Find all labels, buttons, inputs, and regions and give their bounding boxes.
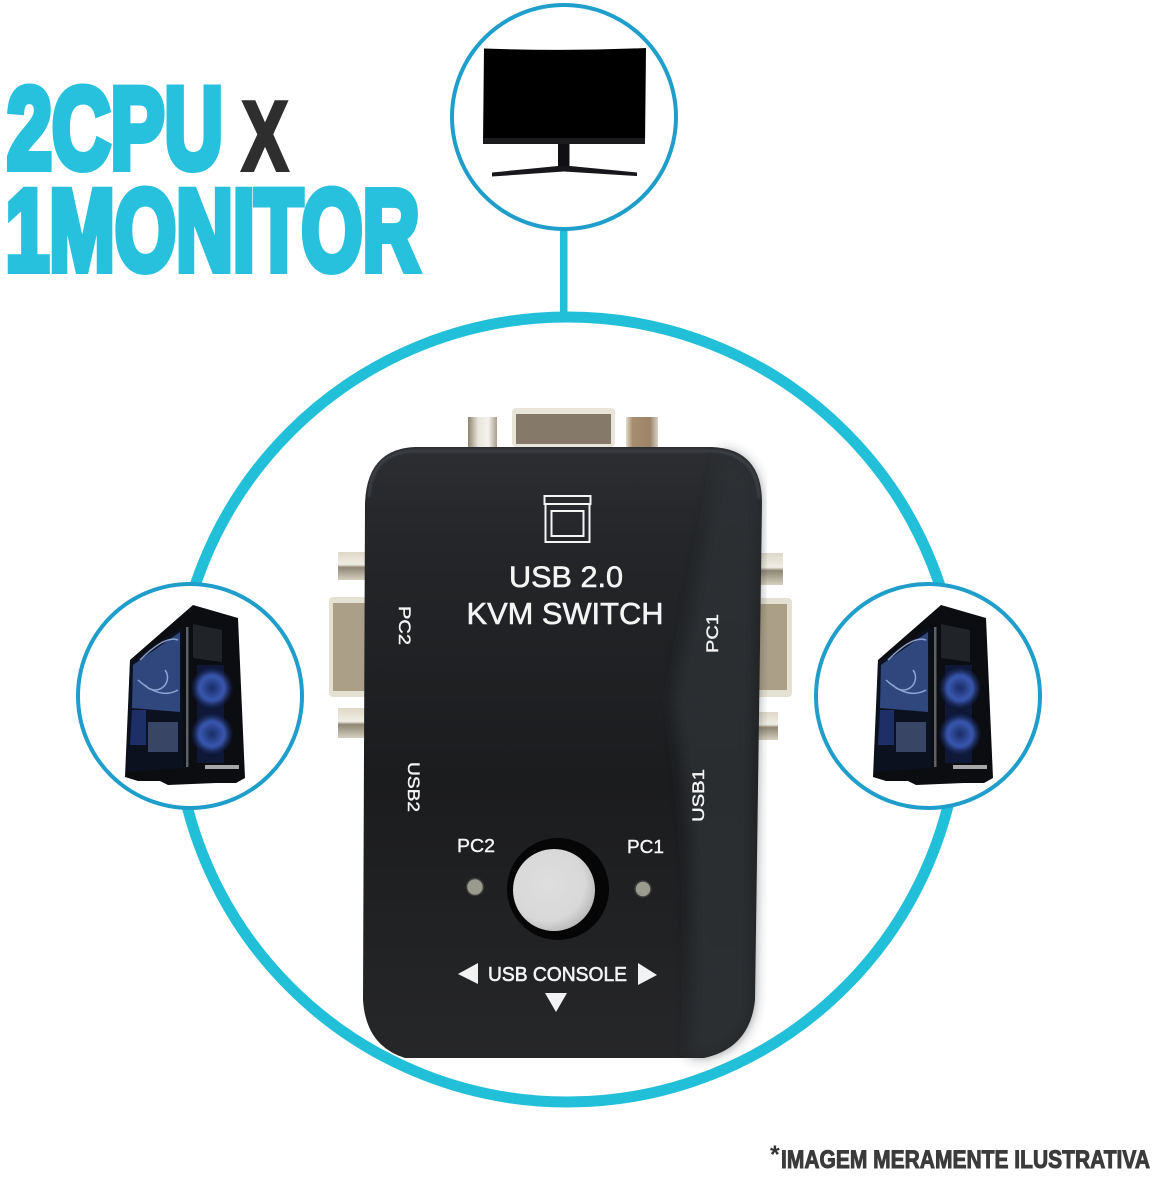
arrow: down [545, 993, 567, 1012]
label: USB2 port: USB2 [404, 762, 423, 812]
label: USB 2.0: USB 2.0 [509, 561, 623, 594]
KVM switch device [329, 408, 792, 1058]
title [6, 65, 420, 295]
device body [363, 447, 762, 1058]
switch button [507, 838, 609, 940]
PC callout circle: right [816, 584, 1040, 808]
icon: PC tower [873, 605, 993, 785]
LED: PC1 [635, 881, 651, 897]
icon: PC tower [125, 605, 245, 785]
device top rim highlight [369, 451, 759, 498]
monitor callout circle [452, 5, 676, 229]
icon: monitor [483, 48, 646, 176]
footnote [770, 1141, 1150, 1174]
title line: 2CPU: 2CPU [7, 65, 223, 193]
large ring connecting the devices [175, 317, 960, 1102]
VGA connector: top [468, 408, 658, 447]
label: PC1 port: PC1 [703, 614, 722, 653]
label: USB1 port: USB1 [689, 769, 708, 822]
footnote asterisk: * [770, 1141, 780, 1169]
label: USB CONSOLE: USB CONSOLE [488, 964, 627, 986]
VGA connector: right [754, 553, 792, 740]
PC callout circle: left [78, 584, 302, 808]
label: KVM SWITCH: KVM SWITCH [466, 596, 664, 631]
label: PC2 LED: PC2 [457, 836, 495, 856]
label: PC1 LED: PC1 [627, 837, 664, 857]
connector line from monitor to ring [560, 228, 568, 314]
title line: 1MONITOR: 1MONITOR [6, 167, 420, 295]
arrow: left [458, 963, 478, 984]
title connector: x: X [242, 81, 288, 191]
VGA connector: left [329, 552, 368, 738]
LED: PC2 [466, 878, 484, 896]
device side facet [672, 452, 758, 1055]
arrow: right [638, 963, 657, 985]
label: PC2 port: PC2 [395, 606, 414, 645]
icon: window symbol [544, 496, 590, 542]
